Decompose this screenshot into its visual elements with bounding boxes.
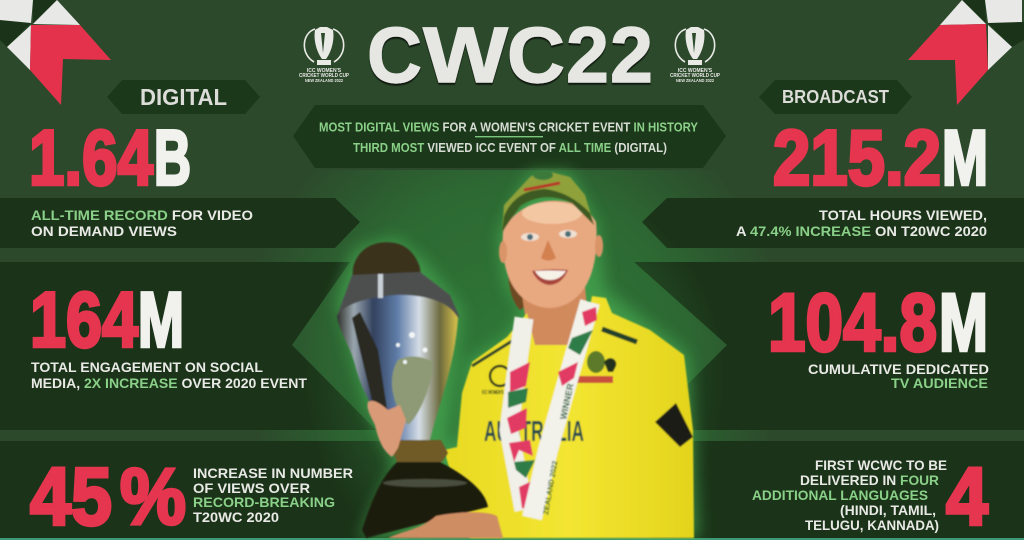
photo: player: ICC WOMEN'S CWC [482,390,512,396]
panel: right dark section audience [634,262,1024,430]
text: four languages: DELIVERED IN FOUR [800,472,939,488]
panel: right dark section bottom [650,441,1024,538]
ears [499,241,507,263]
stat: 1.64B: B [154,113,191,201]
icon: right arrow mark [908,0,1024,105]
text: cumulative audience: TV AUDIENCE [891,375,988,391]
photo: player [444,170,694,538]
stat: 4: 4 [946,451,988,540]
title: C [367,10,422,99]
panel: right dark band hours [642,198,1024,248]
heading: digital [107,80,260,114]
text: total engagement: MEDIA, 2X INCREASE OVER 2020 EVENT [31,375,307,391]
stat: 164M: M [138,275,184,363]
text: four languages: ADDITIONAL LANGUAGES [752,487,928,503]
trophy rim [337,272,460,318]
title [367,10,653,99]
trophy neck [393,440,448,462]
text: four languages: TELUGU, KANNADA) [805,517,939,533]
stat: 104.8M: 104.8 [768,277,937,368]
text: total engagement [31,359,307,391]
stat: 1.64B: 1.64 [29,113,153,201]
stat: 215.2M: M [942,113,988,201]
text: increase in views: OF VIEWS OVER [193,480,310,496]
title: 2 [610,10,653,99]
nose [541,240,556,260]
lower hand [388,512,503,538]
crest [577,351,616,383]
stat: 104.8M: M [939,277,988,368]
trophy base [362,462,488,538]
text: four languages: (HINDI, TAMIL, [840,502,936,518]
text: four languages: FIRST WCWC TO BE [815,457,947,473]
stat: 45%: 45 [30,451,112,540]
text: all-time record: ON DEMAND VIEWS [31,223,177,239]
forehead highlight [522,202,582,224]
heading: broadcast: BROADCAST [782,86,890,107]
text: increase in views: INCREASE IN NUMBER [193,465,353,481]
text: cumulative audience [808,361,989,391]
headline text: MOST DIGITAL VIEWS FOR A WOMEN'S CRICKET EVENT IN HISTORY [319,120,699,134]
heading: broadcast [759,80,912,114]
stat: 215.2M: 215.2 [773,113,941,201]
icon: right event logo [670,27,721,83]
icon: left event logo [299,27,350,83]
panel: headline banner [293,105,726,168]
title: C [507,10,565,99]
text: increase in views: T20WC 2020 [193,509,279,525]
face [503,201,597,308]
panel: left dark section engagement [0,262,376,430]
cap [502,170,594,232]
photo: player: ZEALAND 2022 [541,460,559,515]
jersey [444,296,694,538]
trophy reflection [392,356,433,425]
title: 2 [566,10,609,99]
text: total hours viewed: A 47.4% INCREASE ON T20WC 2020 [736,223,987,239]
trophy dark band [352,312,388,415]
ribbon left [509,318,524,510]
stat: 45%: % [120,452,186,540]
stat: 164M: 164 [30,275,138,363]
text: four languages [752,457,947,533]
headline text: THIRD MOST VIEWED ICC EVENT OF ALL TIME (DIGITAL) [353,141,667,155]
icon: left arrow mark [0,0,111,105]
eyes [521,233,539,241]
text: total hours viewed: TOTAL HOURS VIEWED, [819,207,987,223]
hair [508,240,535,310]
text: cumulative audience: CUMULATIVE DEDICATED [808,361,989,377]
central glow [245,170,785,540]
upper hand [367,401,406,457]
headline text [319,120,699,155]
text: increase in views [193,465,353,525]
panel: left dark band record [0,198,360,248]
trophy bowl [337,295,458,440]
arm patch [655,403,693,447]
player neck [522,285,590,350]
ribbon right pattern [558,307,597,386]
sponsor logo [490,366,510,386]
bottom line [0,538,1024,540]
text: increase in views: RECORD-BREAKING [193,494,335,510]
heading: digital: DIGITAL [140,84,227,110]
text: all-time record: ALL-TIME RECORD FOR VIDEO [31,207,253,223]
stat: 45% [30,451,186,540]
jersey shoulder stripes [472,341,512,366]
title: W [423,10,508,99]
photo: figure halo [337,172,698,538]
panel: left dark section bottom [0,441,420,538]
ribbon left pattern [507,362,534,510]
trophy lid [352,242,422,285]
mouth [532,269,568,285]
trophy sparkles [396,332,428,364]
photo: trophy [337,242,503,538]
central glow overlay [300,170,730,540]
text: total engagement: TOTAL ENGAGEMENT ON SOCIAL [31,359,263,375]
jersey name: AUSTRALIA [484,416,584,448]
text: total hours viewed [736,207,987,239]
text: all-time record [31,207,253,239]
trophy rim highlight [378,274,383,298]
ribbon text: WINNER [558,382,576,420]
ribbon right [532,302,590,518]
